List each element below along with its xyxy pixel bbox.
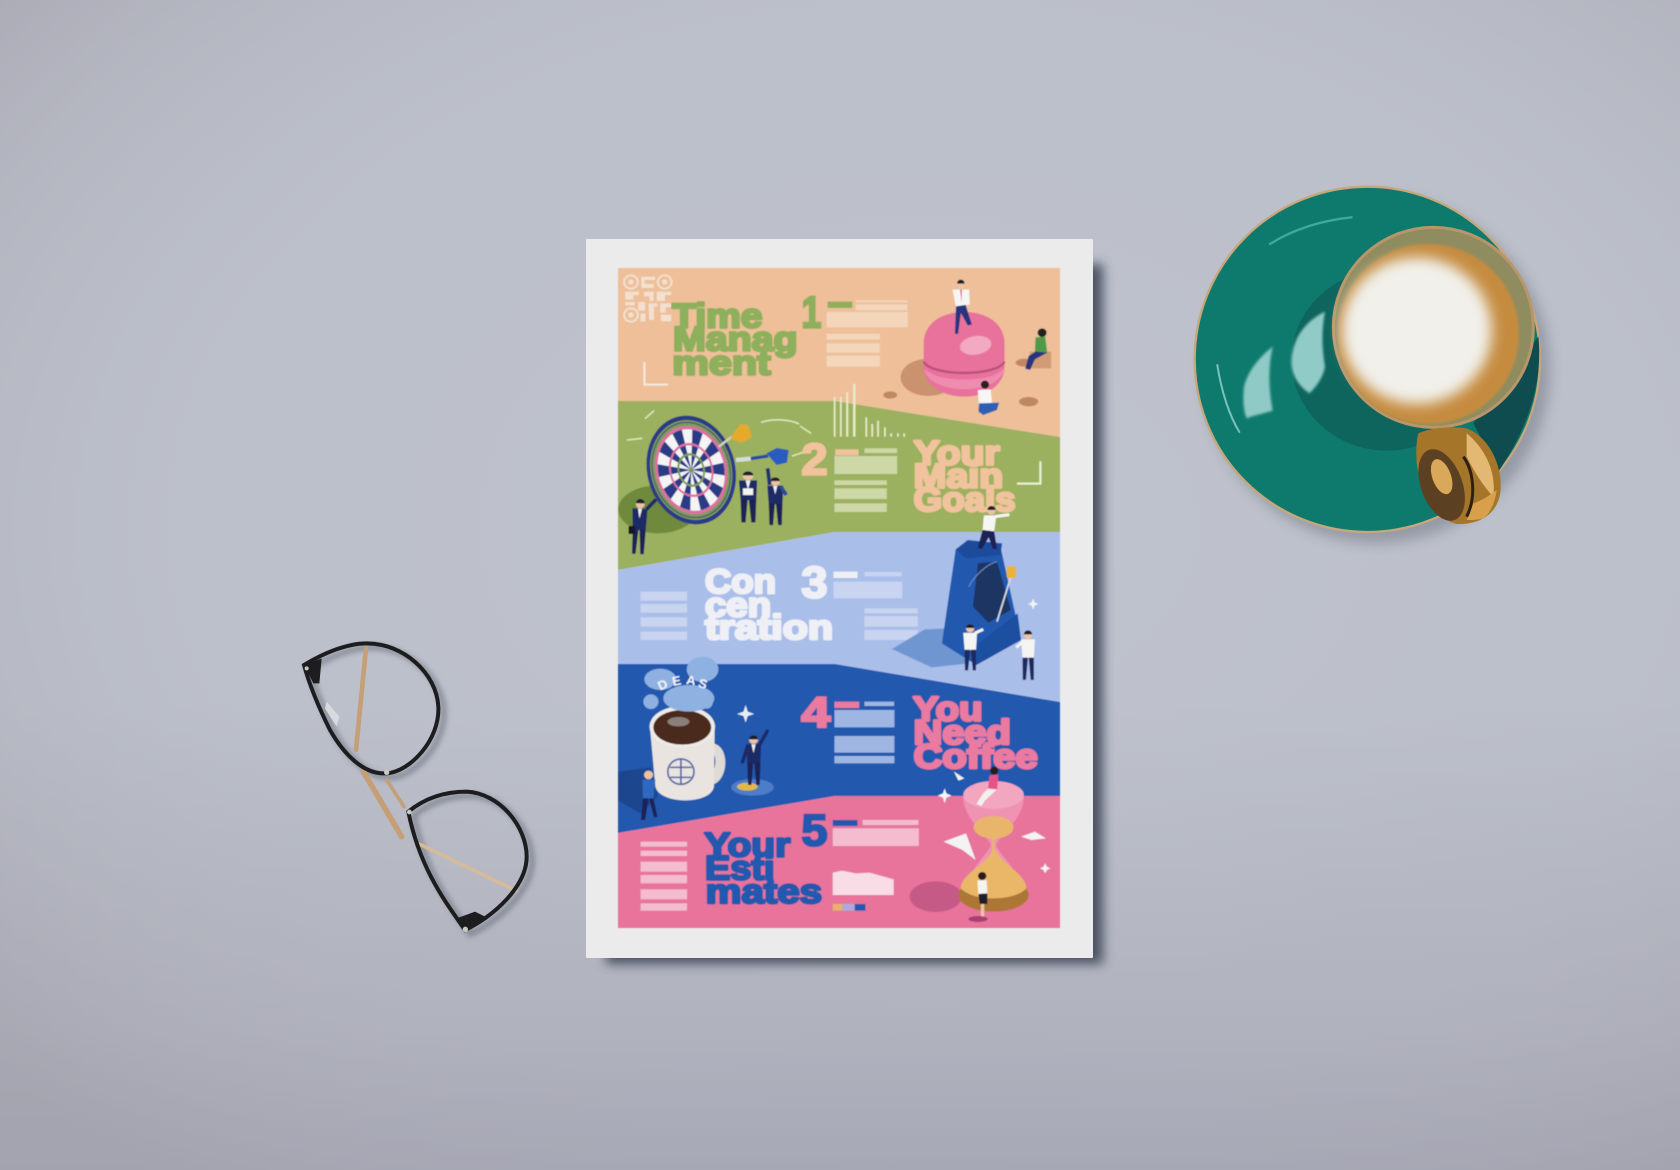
title: You Need Coffee: You bbox=[913, 691, 983, 729]
poster content layer bbox=[618, 275, 1051, 922]
cup highlight bbox=[1291, 312, 1325, 393]
right lens frame bbox=[408, 792, 527, 930]
left lens frame bbox=[304, 643, 438, 773]
band: main goals green bbox=[618, 401, 1060, 570]
illustration: idea clouds bbox=[643, 657, 718, 712]
copy blocks 2 bbox=[834, 448, 897, 512]
cup rim bbox=[1333, 227, 1533, 427]
title: Your Main Goals: Your bbox=[914, 435, 1000, 472]
chart: vertical bars bbox=[834, 384, 905, 437]
title: Time Management: Manag bbox=[673, 321, 798, 359]
poster shadow bbox=[606, 264, 1103, 964]
dash 4 bbox=[834, 702, 859, 708]
bracket: section 2 bbox=[1017, 461, 1040, 484]
copy blocks 1 bbox=[827, 300, 908, 367]
illustration: dartboard bbox=[618, 407, 747, 533]
title: Time Management: Time bbox=[672, 298, 762, 335]
figure: seated woman bbox=[1025, 328, 1051, 370]
band: concentration light blue bbox=[618, 532, 1060, 702]
swoosh lines bbox=[627, 411, 811, 456]
figures: men beside dartboard bbox=[629, 468, 786, 554]
QR code bbox=[624, 275, 672, 322]
band: time management peach bbox=[618, 268, 1060, 437]
copy blocks 4 bbox=[834, 702, 894, 763]
area chart bbox=[833, 871, 894, 895]
shadow dot bbox=[968, 916, 988, 922]
figures: men at metronome base bbox=[963, 624, 1035, 680]
title: Concentration: tration bbox=[705, 609, 833, 647]
title: Your Estimates: Esti bbox=[705, 850, 775, 888]
dash 3 bbox=[833, 572, 858, 578]
illustration: pink timer bbox=[883, 312, 1038, 406]
figure: man holding mug bbox=[641, 771, 657, 820]
numeral 3: 3 bbox=[801, 557, 828, 607]
sparkle bbox=[737, 705, 754, 723]
copy blocks 5 bbox=[641, 820, 919, 911]
coffee cup and saucer bbox=[1195, 187, 1550, 543]
saucer glare bbox=[1243, 347, 1273, 418]
band: coffee dark blue bbox=[618, 664, 1060, 833]
gold handle bbox=[1409, 427, 1501, 527]
numeral 1: 1 bbox=[801, 287, 821, 337]
title: Your Estimates: mates bbox=[706, 873, 822, 911]
poster artwork bbox=[618, 268, 1060, 928]
numeral 4: 4 bbox=[801, 690, 830, 737]
title: You Need Coffee: Need bbox=[914, 714, 1011, 752]
numeral 5: 5 bbox=[801, 805, 828, 855]
title: Concentration: cen bbox=[705, 587, 771, 624]
lower poster layer bbox=[618, 506, 1050, 922]
dash 1 bbox=[828, 302, 852, 308]
numeral 2: 2 bbox=[801, 434, 828, 484]
illustration: idea clouds: E bbox=[671, 673, 683, 689]
figure: woman inside hourglass bbox=[977, 872, 987, 917]
illustration: idea clouds: D bbox=[655, 676, 670, 693]
illustration: metronome bbox=[892, 540, 1021, 667]
figure: woman on hourglass bbox=[976, 767, 998, 806]
figure: man on coin platform bbox=[731, 730, 774, 796]
chart legend bbox=[833, 904, 865, 911]
dart: yellow bbox=[719, 424, 752, 447]
bracket: section 1 bbox=[644, 362, 668, 385]
cup body bbox=[1292, 269, 1482, 451]
title: Your Main Goals bbox=[914, 435, 1016, 519]
figure: reader at timer bbox=[978, 381, 999, 415]
milk froth bbox=[1342, 257, 1492, 404]
title: Your Estimates bbox=[704, 827, 822, 911]
figure: man on timer bbox=[953, 280, 972, 334]
title: Concentration: Con bbox=[705, 563, 776, 601]
saucer highlights bbox=[1217, 217, 1352, 432]
illustration: idea clouds: A bbox=[685, 672, 697, 688]
illustration: hourglass bbox=[910, 781, 1029, 912]
title: Your Estimates: Your bbox=[704, 827, 790, 864]
title: You Need Coffee: Coffee bbox=[914, 738, 1038, 776]
copy blocks 3 bbox=[641, 572, 918, 640]
saucer dark reflection bbox=[1473, 337, 1539, 472]
title: Your Main Goals: Goals bbox=[914, 481, 1016, 519]
dash 5 bbox=[833, 820, 858, 826]
saucer bbox=[1195, 187, 1540, 532]
figure: man on metronome bbox=[978, 506, 1009, 549]
paper sheet bbox=[586, 239, 1093, 958]
title: Your Main Goals: Main bbox=[914, 458, 1003, 496]
title: Time Management: ment bbox=[672, 345, 771, 382]
dart: blue bbox=[736, 448, 789, 465]
crema bbox=[1338, 244, 1519, 424]
glasses bbox=[304, 643, 532, 934]
sparkles bbox=[938, 598, 1050, 873]
title: You Need Coffee bbox=[913, 691, 1038, 776]
title: Concentration bbox=[705, 563, 833, 647]
illustration: coffee mug bbox=[618, 706, 725, 813]
paper planes bbox=[944, 772, 1046, 860]
illustration: idea clouds: S bbox=[696, 675, 710, 692]
dash 2 bbox=[835, 449, 859, 455]
band: estimates pink bbox=[618, 796, 1060, 928]
title: Time Management bbox=[672, 298, 798, 382]
gold arms and bridge bbox=[356, 648, 516, 891]
